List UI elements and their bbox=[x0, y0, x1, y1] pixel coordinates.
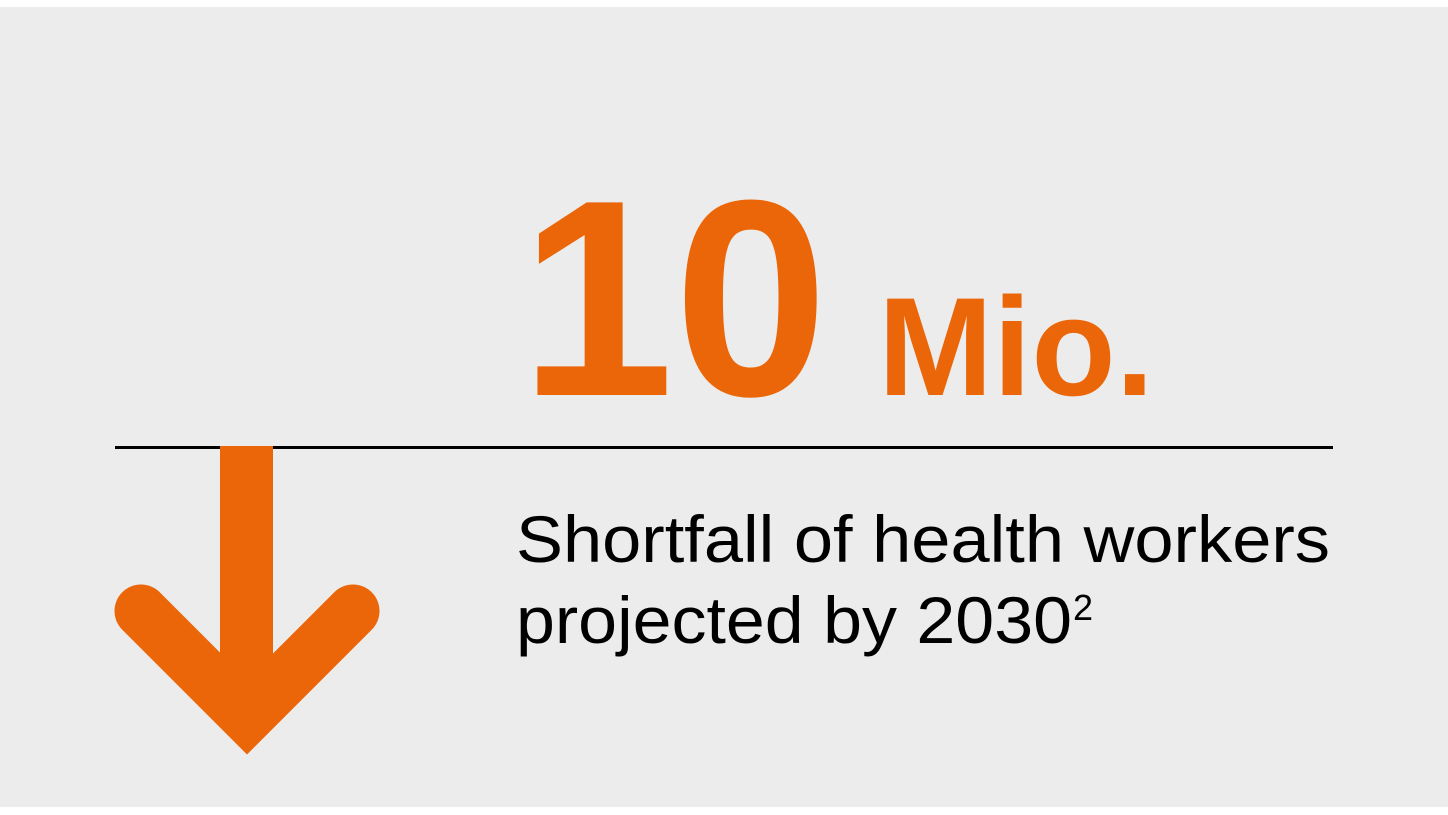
big number: 10 Mio. bbox=[520, 143, 1154, 455]
big number: 10 Mio.: 10 bbox=[520, 143, 828, 455]
description text bbox=[516, 502, 1330, 657]
description text: 2 bbox=[1073, 587, 1093, 628]
big number: 10 Mio.: Mio. bbox=[878, 268, 1154, 425]
icon: down arrow bbox=[141, 446, 353, 717]
divider line bbox=[115, 446, 1333, 449]
description text: projected by 2030 bbox=[516, 583, 1072, 657]
description text: Shortfall of health workers bbox=[516, 502, 1330, 576]
